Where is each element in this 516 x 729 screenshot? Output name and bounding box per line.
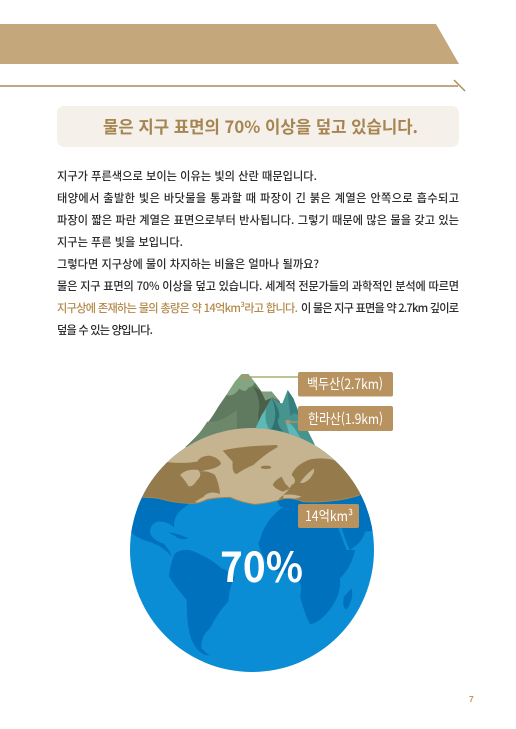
icon: Halla mountain	[255, 390, 315, 445]
page number: 7	[469, 694, 474, 704]
body text: 이 물은 지구 표면을 약 2.7km 깊이로	[301, 300, 459, 316]
body text: 지구상에 존재하는 물의 총량은 약 14억km³라고 합니다.	[57, 300, 298, 316]
body text: 지구가 푸른색으로 보이는 이유는 빛의 산란 때문입니다.	[57, 168, 317, 184]
south america	[169, 550, 235, 656]
header rule with tick	[0, 80, 465, 91]
body text: 태양에서 출발한 빛은 바닷물을 통과할 때 파장이 긴 붉은 계열은 안쪽으로 흡수되고	[57, 190, 459, 206]
arabia and asia	[342, 510, 372, 550]
water continents	[131, 480, 372, 656]
callout: Baekdu label: 백두산(2.7km)	[307, 374, 383, 394]
callout: water volume label: 14억km³	[305, 506, 353, 526]
70 percent label: 70%	[220, 534, 303, 594]
heading panel	[57, 106, 459, 147]
header banner	[0, 24, 459, 64]
caribbean detail	[168, 532, 188, 539]
land cap	[142, 428, 361, 504]
body text: 덮을 수 있는 양입니다.	[57, 322, 153, 338]
body text: 그렇다면 지구상에 물이 차지하는 비율은 얼마나 될까요?	[57, 256, 319, 272]
europe edge	[277, 480, 372, 528]
africa	[258, 505, 355, 624]
continents on land band	[142, 445, 361, 503]
body text: 지구는 푸른 빛을 보입니다.	[57, 234, 183, 250]
ocean disc	[130, 428, 374, 672]
shoreline edge	[120, 495, 360, 504]
callout: Halla leader line	[286, 420, 299, 424]
icon: Baekdu mountain	[185, 374, 315, 447]
north america	[131, 480, 189, 556]
globe illustration	[130, 374, 374, 672]
madagascar	[343, 588, 352, 609]
callout: Halla label	[298, 406, 393, 431]
body text: 파장이 짧은 파란 계열은 표면으로부터 반사됩니다. 그렇기 때문에 많은 물을 갖고 있는	[57, 212, 459, 228]
callout: Halla label: 한라산(1.9km)	[308, 409, 383, 429]
heading text: 물은 지구 표면의 70% 이상을 덮고 있습니다.	[103, 113, 418, 138]
body text: 물은 지구 표면의 70% 이상을 덮고 있습니다. 세계적 전문가들의 과학적인 분석에 따르면	[57, 278, 459, 294]
callout: Baekdu leader line	[243, 375, 299, 380]
sand inlets	[180, 468, 314, 504]
body text	[57, 168, 459, 338]
